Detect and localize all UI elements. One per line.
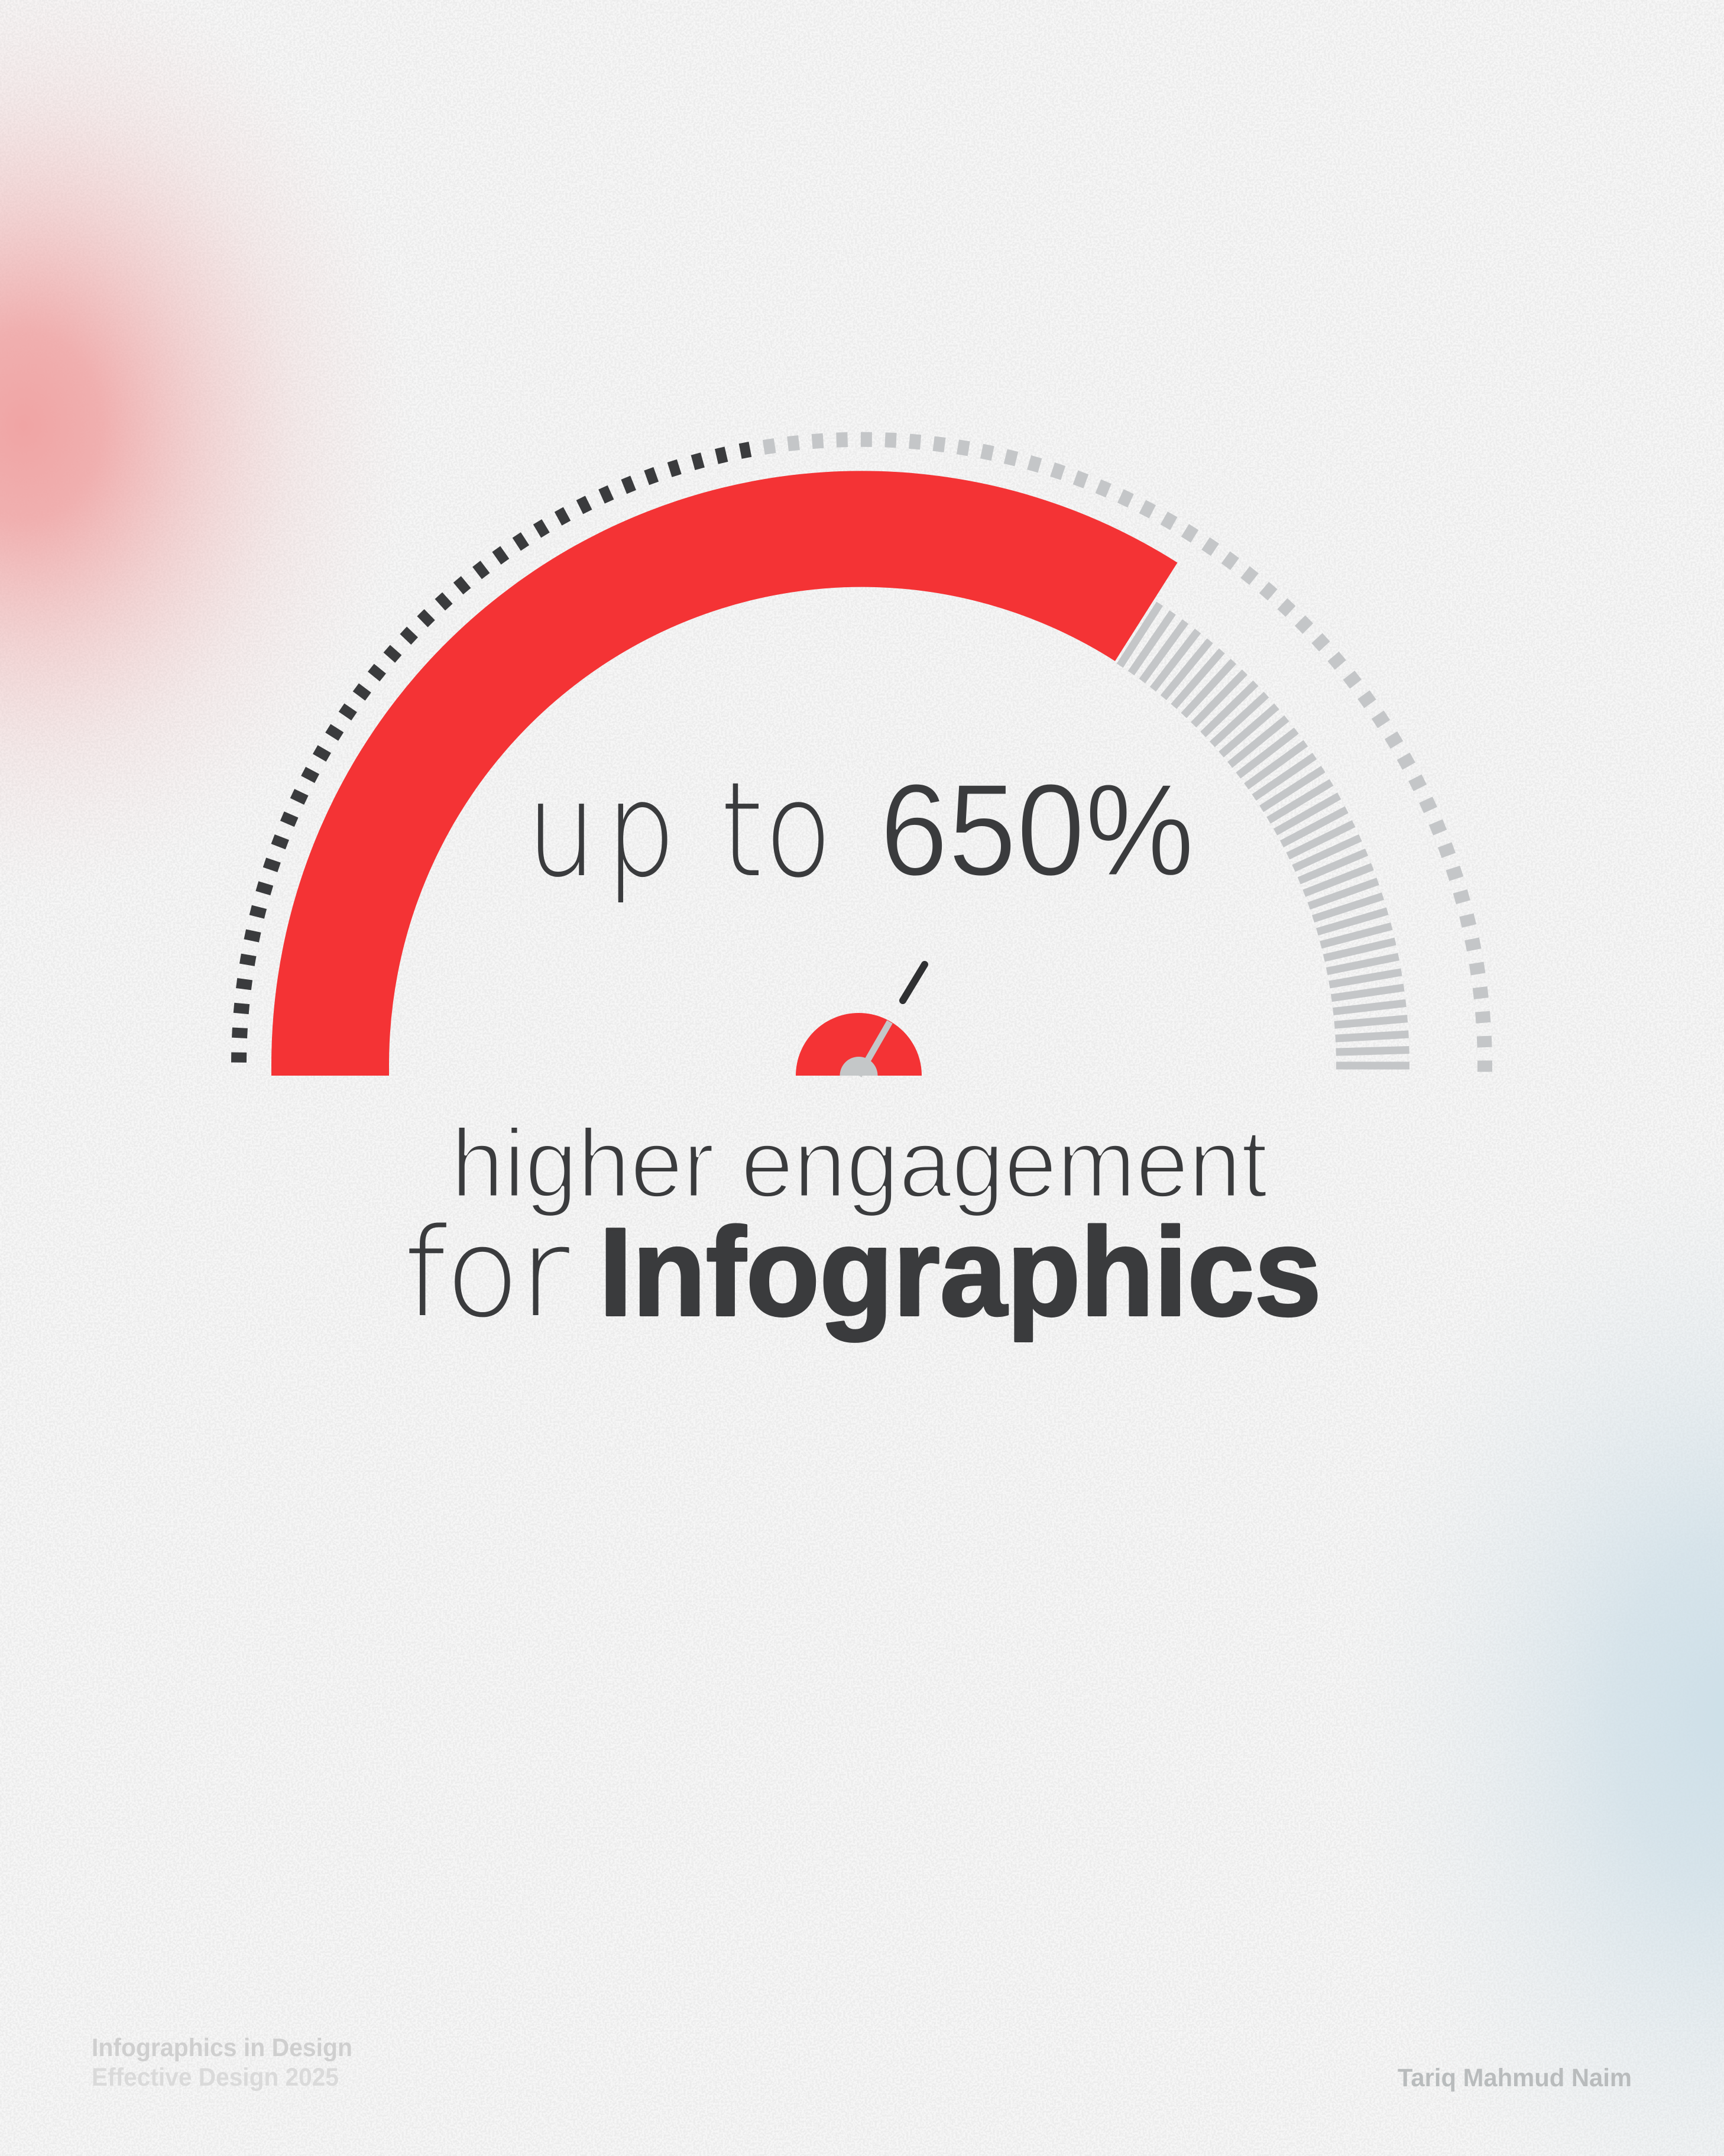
- red gauge arc: [271, 471, 1177, 1076]
- text: Infographics: Infographics: [599, 1202, 1321, 1342]
- main gauge: [231, 432, 1492, 1076]
- dark outer tick dots: [231, 442, 751, 1063]
- pointer mark: [903, 964, 925, 1001]
- blue background glow: [1301, 1064, 1724, 2156]
- red background glow: [0, 0, 449, 946]
- text: Effective Design 2025: Effective Design 2025: [92, 2063, 339, 2092]
- text: Infographics in Design: Infographics in Design: [92, 2034, 352, 2062]
- headline: up to 650%: [0, 755, 1194, 907]
- headline: higher engagement for Infographics: [404, 1109, 1321, 1344]
- text: higher engagement: higher engagement: [451, 1109, 1268, 1218]
- icon: small speedometer: [796, 964, 925, 1076]
- grey outer tick dots: [763, 432, 1492, 1072]
- footer left credit: [92, 2034, 352, 2092]
- speedometer dial: [796, 1013, 922, 1076]
- speedometer hub: [840, 1057, 877, 1076]
- text: up to: up to: [0, 755, 832, 907]
- footer right credit: Tariq Mahmud Naim: [1398, 2064, 1632, 2092]
- text: for: for: [404, 1202, 569, 1344]
- grey striped remainder of gauge: [1117, 602, 1409, 1070]
- speedometer needle: [858, 1022, 890, 1076]
- text: 650%: 650%: [880, 757, 1194, 904]
